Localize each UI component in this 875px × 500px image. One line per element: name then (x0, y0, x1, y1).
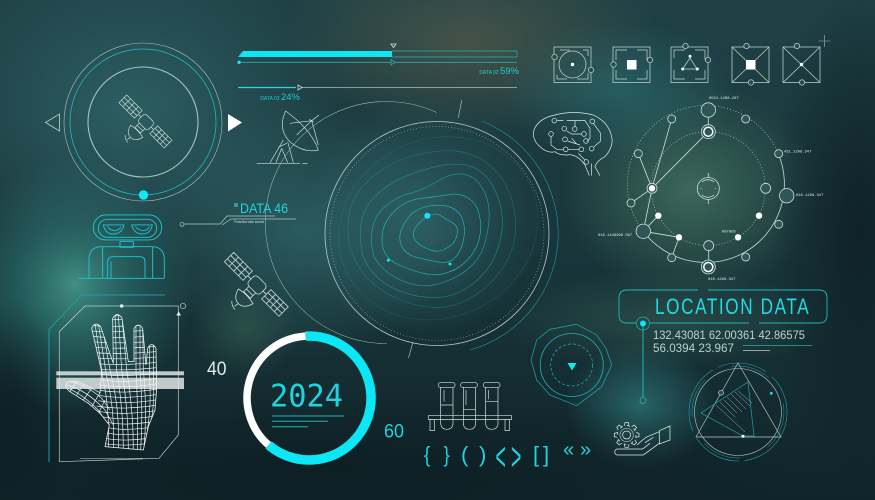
year: 2024 (270, 378, 343, 414)
connector line (184, 216, 296, 225)
icon: brain circuit (533, 112, 612, 176)
bracket row: » (580, 439, 591, 461)
network labels: 007956 (722, 230, 736, 234)
bar: data 02 (237, 44, 517, 65)
underlines (272, 416, 344, 427)
bracket row: « (563, 439, 574, 461)
bracket row (424, 435, 591, 479)
icon: right triangle (228, 114, 242, 132)
progress bars (237, 44, 520, 103)
radar octagon (531, 324, 612, 406)
triangle scanner (689, 363, 787, 461)
bracket row: ] (543, 442, 549, 467)
number: 40: 40 (207, 359, 226, 380)
donut white arc (247, 336, 306, 445)
robot icon (78, 215, 164, 278)
icon: square target (611, 47, 653, 82)
location values: 56.0394 23.967 (653, 341, 734, 355)
network labels: 016.1298.347 (796, 194, 823, 198)
scan frame (49, 295, 186, 462)
caption: Phasellus vitae laoreat (234, 220, 264, 224)
bracket row: < (496, 435, 506, 479)
label: data 03 24%: DATA 03 24% (260, 92, 301, 103)
dial position dot (139, 190, 148, 200)
satellite dial (46, 43, 242, 201)
icon: test tubes (428, 383, 512, 431)
outer rings (265, 100, 558, 358)
bracket row: ) (479, 442, 486, 467)
hand scan (49, 295, 186, 462)
location data panel (619, 290, 827, 404)
icon: gear in hand (614, 423, 670, 455)
contour markers (387, 213, 452, 266)
bracket row: [ (533, 442, 539, 467)
scan bars (56, 371, 184, 389)
heading: LOCATION DATA (655, 295, 809, 320)
hand wireframe (66, 313, 160, 450)
icon: circle target (552, 47, 594, 82)
contour map (265, 100, 568, 358)
donut chart 2024 (247, 336, 371, 460)
icon: satellite (104, 95, 172, 163)
network labels (598, 97, 823, 282)
label: data 02 59%: DATA 02 59% (479, 66, 520, 77)
contour lines (308, 104, 568, 352)
bracket row: } (444, 444, 450, 467)
icon: satellite dish (257, 111, 319, 163)
panel outline (619, 290, 827, 323)
icon: left triangle (46, 114, 60, 131)
icon: triangle target (671, 43, 711, 82)
icon: envelope square (732, 43, 769, 85)
location values: 132.43081 62.00361 42.86575 (653, 328, 805, 342)
network diagram (598, 97, 823, 282)
bracket row: ( (461, 442, 469, 467)
network links (631, 117, 709, 260)
network nodes (627, 103, 794, 274)
heading: DATA 46 (240, 201, 288, 216)
icon: satellite lower (206, 252, 288, 335)
icon row (552, 35, 830, 85)
location values (653, 328, 805, 355)
bar: data 03 (238, 85, 517, 90)
bracket row: { (424, 444, 430, 467)
label: data 46 (180, 201, 296, 226)
donut cyan arc (269, 336, 371, 460)
network labels: 431.1298.347 (784, 150, 811, 154)
network labels: 016.1448996.367 (598, 234, 632, 238)
icon: cross square (783, 35, 830, 85)
network rings (627, 106, 784, 263)
connector (636, 317, 650, 404)
network hub (697, 173, 719, 204)
network labels: 016.1298.347 (708, 278, 735, 282)
number: 60: 60 (384, 422, 404, 442)
bracket row: > (511, 435, 521, 479)
network labels: 0531.1288.267 (709, 97, 739, 101)
